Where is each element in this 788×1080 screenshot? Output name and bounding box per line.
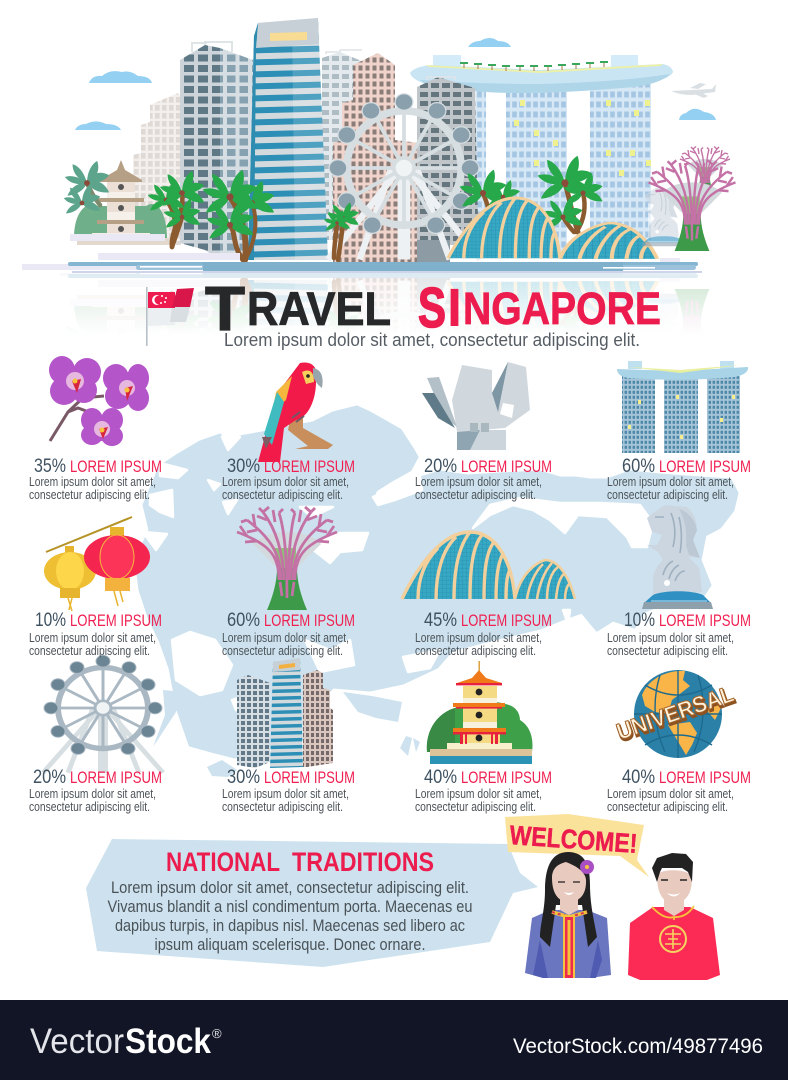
gray tower [180, 42, 253, 260]
stat: 45% domes: consectetur adipiscing elit. [415, 644, 536, 658]
stat: 35% orchid: 35% [34, 456, 66, 477]
water [22, 234, 702, 273]
gray back tower [322, 50, 364, 240]
stat: 45% domes: Lorem ipsum dolor sit amet, [415, 631, 542, 645]
stat: 40% universal: LOREM IPSUM [659, 768, 751, 787]
vectorstock logo: ® [212, 1026, 222, 1041]
stat: 30% parrot: Lorem ipsum dolor sit amet, [222, 475, 349, 489]
stat: 60% sands [607, 456, 751, 502]
stat: 60% supertree: Lorem ipsum dolor sit amet, [222, 631, 349, 645]
merlion statue [642, 188, 686, 246]
singapore map background [136, 407, 737, 777]
icon: universal globe: UNIVERSAL [613, 680, 737, 745]
stat: 60% supertree: 60% [227, 610, 260, 631]
stat: 45% domes: 45% [424, 610, 457, 631]
stat: 40% pagoda [415, 767, 552, 814]
icon: parrot [258, 362, 333, 462]
stat: 10% lanterns [29, 610, 162, 658]
stat: 20% flyer: Lorem ipsum dolor sit amet, [29, 787, 156, 801]
icon: pagoda [427, 661, 532, 764]
stat: 35% orchid: LOREM IPSUM [70, 457, 162, 476]
stat: 20% flyer: LOREM IPSUM [70, 768, 162, 787]
title: S [418, 276, 446, 340]
body text: dapibus turpis, in dapibus nisl. Maecenas sed libero ac [115, 916, 465, 935]
body text: ipsum aliquam scelerisque. Donec ornare. [154, 935, 426, 954]
icon: artscience museum [422, 362, 530, 450]
stat: 20% flyer: consectetur adipiscing elit. [29, 800, 150, 814]
title: I [447, 278, 462, 338]
vectorstock logo [30, 1022, 222, 1061]
icon: gardens by the bay domes [402, 532, 575, 599]
icon: singapore flyer [43, 655, 163, 773]
gray right tower [417, 77, 478, 262]
stat: 20% flyer: 20% [33, 767, 66, 788]
gardens domes [448, 198, 657, 259]
icon: chinese lanterns [44, 517, 150, 611]
stat: 35% orchid: consectetur adipiscing elit. [29, 488, 150, 502]
stat: 30% skyscrapers [222, 767, 355, 814]
stat: 10% merlion: Lorem ipsum dolor sit amet, [607, 631, 734, 645]
stat: 40% universal: 40% [622, 767, 655, 788]
pagoda [74, 160, 173, 245]
stat: 40% pagoda: Lorem ipsum dolor sit amet, [415, 787, 542, 801]
icon: universal globe: UNIVERSAL [614, 682, 738, 747]
stat: 20% museum: consectetur adipiscing elit. [415, 488, 536, 502]
subtitle: Lorem ipsum dolor sit amet, consectetur adipiscing elit. [224, 330, 640, 350]
stat: 40% pagoda: LOREM IPSUM [461, 768, 552, 787]
icon: marina bay sands towers [617, 361, 748, 453]
stat: 10% lanterns: 10% [35, 610, 66, 631]
skyline reflection [68, 273, 710, 326]
cityscape skyline [22, 18, 736, 273]
title [205, 275, 661, 344]
stat: 10% merlion [607, 610, 751, 658]
title: T [205, 275, 245, 344]
stat: 30% skyscrapers: LOREM IPSUM [264, 768, 355, 787]
flag of singapore [146, 287, 194, 346]
stat: 30% parrot: 30% [227, 456, 260, 477]
stat: 60% sands: Lorem ipsum dolor sit amet, [607, 475, 734, 489]
stat: 35% orchid [29, 456, 162, 502]
panel: national traditions speech bubble [86, 839, 538, 967]
supertrees [648, 146, 736, 251]
title: NGAPORE [463, 283, 661, 334]
stat: 35% orchid: Lorem ipsum dolor sit amet, [29, 475, 156, 489]
footer bar [0, 1000, 788, 1080]
stat: 30% skyscrapers: 30% [227, 767, 260, 788]
icon: supertree [237, 507, 337, 610]
observation wheel [328, 94, 480, 259]
stat: 10% merlion: LOREM IPSUM [659, 611, 751, 630]
light back building [133, 93, 181, 245]
stat: 10% merlion: consectetur adipiscing elit. [607, 644, 728, 658]
stat: 20% museum [415, 456, 552, 502]
image id: VectorStock.com/49877496 [513, 1035, 763, 1058]
stat: 45% domes [415, 610, 552, 658]
marina bay sands [410, 55, 673, 256]
icon: orchid [49, 356, 149, 446]
blue tower [248, 18, 328, 260]
heading: national traditions [166, 847, 434, 877]
stat: 60% sands: 60% [622, 456, 655, 477]
man in traditional shirt [628, 853, 720, 980]
stat: 30% parrot: consectetur adipiscing elit. [222, 488, 343, 502]
pink tower [333, 53, 419, 262]
stat: 30% parrot: LOREM IPSUM [264, 457, 355, 476]
icon: merlion [642, 505, 713, 609]
stat: 60% sands: LOREM IPSUM [659, 457, 751, 476]
palm trees [64, 156, 603, 260]
body text: Lorem ipsum dolor sit amet, consectetur adipiscing elit. [111, 878, 469, 897]
stat: 40% pagoda: 40% [424, 767, 457, 788]
stat: 30% skyscrapers: consectetur adipiscing elit. [222, 800, 343, 814]
welcome speech bubble: WELCOME! [509, 820, 638, 859]
stat: 45% domes: LOREM IPSUM [461, 611, 552, 630]
stat: 20% museum: LOREM IPSUM [461, 457, 552, 476]
stat: 40% universal: consectetur adipiscing elit. [607, 800, 728, 814]
heading: national traditions: TRADITIONS [292, 847, 434, 877]
body text [108, 878, 472, 954]
stat: 10% lanterns: consectetur adipiscing elit. [29, 644, 150, 658]
stat: 60% supertree [222, 610, 355, 658]
stat: 60% supertree: LOREM IPSUM [264, 611, 355, 630]
body text: Vivamus blandit a nisl condimentum porta. Maecenas eu [108, 897, 472, 916]
clouds [75, 38, 716, 130]
title: RAVEL [247, 282, 391, 335]
airplane [671, 83, 716, 98]
stat: 40% universal: Lorem ipsum dolor sit amet, [607, 787, 734, 801]
stat: 30% skyscrapers: Lorem ipsum dolor sit amet, [222, 787, 349, 801]
stat: 20% museum: 20% [424, 456, 457, 477]
stat: 60% supertree: consectetur adipiscing elit. [222, 644, 343, 658]
stat: 20% museum: Lorem ipsum dolor sit amet, [415, 475, 542, 489]
stat: 10% lanterns: Lorem ipsum dolor sit amet, [29, 631, 156, 645]
stat: 10% lanterns: LOREM IPSUM [70, 611, 162, 630]
stat: 10% merlion: 10% [624, 610, 655, 631]
stat: 20% flyer [29, 767, 162, 814]
vectorstock logo: Stock [125, 1022, 211, 1061]
woman in traditional dress [525, 852, 611, 978]
icon: skyscrapers [237, 658, 333, 768]
stat: 60% sands: consectetur adipiscing elit. [607, 488, 728, 502]
welcome speech bubble [505, 814, 649, 877]
stat: 40% universal [607, 767, 751, 814]
stat: 30% parrot [222, 456, 355, 502]
vectorstock logo: Vector [30, 1022, 124, 1061]
stat: 40% pagoda: consectetur adipiscing elit. [415, 800, 536, 814]
heading: national traditions: NATIONAL [166, 847, 280, 877]
